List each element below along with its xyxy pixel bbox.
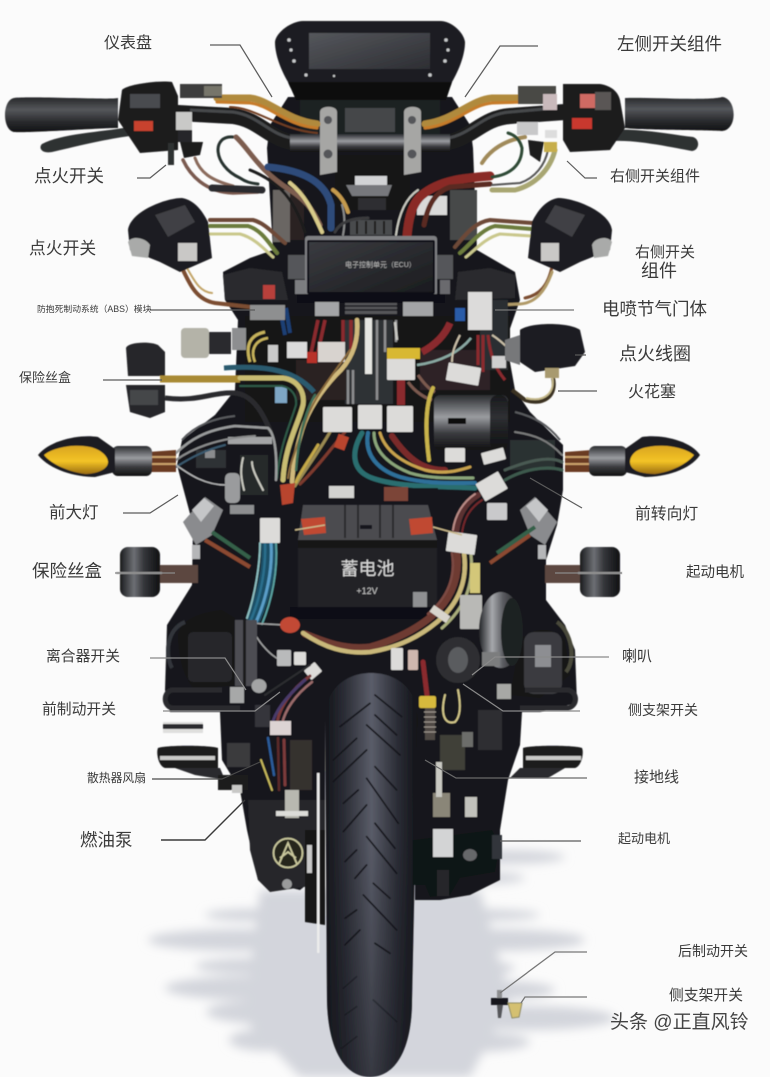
label: horn: 喇叭 [622, 648, 652, 665]
connectors below ECU [297, 294, 445, 316]
dashboard [275, 21, 465, 100]
right cream and brown harness [303, 553, 480, 652]
left engine case [165, 610, 266, 708]
label: clutch switch [46, 648, 246, 690]
label: headlight [49, 495, 178, 522]
gold conduit [160, 376, 240, 382]
right switch block [517, 84, 625, 162]
label: ignition coil: 点火线圈 [619, 344, 691, 364]
side stand and brake switch [491, 990, 522, 1018]
fork leg and logo [248, 773, 325, 953]
connector on lower loom [270, 721, 291, 735]
central headstock [273, 98, 477, 242]
label: instrument panel [104, 33, 272, 97]
logo badge [274, 838, 302, 868]
label: fuse box upper: 保险丝盒 [19, 370, 71, 385]
battery body [298, 540, 437, 607]
label: front turn signal: 前转向灯 [635, 505, 698, 523]
label: ignition switch lower: 点火开关 [29, 239, 96, 258]
label: left switch assembly: 左侧开关组件 [617, 34, 722, 54]
label: throttle body: 电喷节气门体 [602, 299, 707, 319]
lower chassis details [218, 705, 502, 897]
label: radiator fan: 散热器风扇 [87, 771, 146, 785]
label: left switch assembly [465, 34, 722, 97]
left brake lever [40, 127, 130, 152]
ABS and small side fittings [181, 292, 506, 403]
label: right switch assembly lower: 右侧开关 [635, 244, 695, 261]
connectors [260, 348, 508, 680]
label: side stand switch upper [463, 684, 698, 718]
dashboard indicator lights [287, 38, 450, 77]
main coloured wire bundles [176, 320, 562, 533]
left front mount [116, 547, 198, 597]
label: right switch assembly lower: 组件 [641, 261, 677, 281]
left mirror-mount switch [128, 198, 212, 272]
label: starter motor lower: 起动电机 [618, 831, 670, 846]
right foot peg [510, 746, 583, 778]
dome mid-tones [196, 450, 226, 468]
label: side stand switch lower: 侧支架开关 [669, 987, 743, 1004]
watermark: 头条 @正直风铃 [610, 1011, 749, 1033]
fork stems [273, 190, 290, 242]
label: right switch assembly upper: 右侧开关组件 [610, 168, 700, 185]
battery terminals [301, 517, 326, 535]
label: fuel pump: 燃油泵 [80, 830, 132, 850]
ground shadow [148, 850, 615, 1077]
label: horn [472, 648, 652, 675]
ECU [305, 236, 437, 296]
battery voltage: +12V [356, 586, 378, 596]
label: ignition switch upper: 点火开关 [34, 166, 104, 186]
horn [479, 592, 523, 668]
central harness: vertical wires below ECU [245, 300, 510, 422]
battery label: 蓄电池 [340, 559, 394, 579]
right crash bar [520, 690, 576, 708]
side dark modules by ECU [223, 255, 515, 300]
label: side stand switch lower [521, 987, 743, 1004]
label: spark plug [558, 383, 676, 401]
front tyre [325, 673, 418, 1077]
label: rear brake switch: 后制动开关 [678, 943, 748, 959]
right mirror-mount switch [528, 198, 612, 272]
battery top cover [298, 505, 437, 540]
left crash bar [165, 690, 240, 708]
label: fuse box lower: 保险丝盒 [32, 561, 102, 581]
label: ignition coil [575, 344, 691, 364]
turn signal right [565, 436, 700, 477]
left switch block [118, 81, 222, 165]
label: fuel pump [80, 800, 245, 850]
battery [290, 486, 445, 619]
label: ground wire: 接地线 [634, 769, 679, 786]
dashboard screen [309, 33, 430, 69]
right grip [615, 97, 734, 151]
label: ABS module: 防抱死制动系统（ABS）模块 [37, 303, 152, 314]
dome frame [182, 412, 560, 495]
chassis silhouette [165, 97, 577, 900]
label: headlight: 前大灯 [49, 503, 98, 522]
label: instrument panel: 仪表盘 [104, 33, 152, 52]
white neck connector [417, 196, 447, 215]
ECU label: 电子控制单元（ECU） [345, 260, 416, 269]
label: front brake switch [42, 692, 280, 718]
label: radiator fan [87, 762, 260, 785]
label: right switch assembly upper [567, 161, 700, 185]
label: ground wire [425, 760, 679, 786]
label: front turn signal [530, 478, 698, 523]
side grey connectors [183, 473, 557, 567]
handlebar clamps [320, 107, 421, 175]
handlebar wires: right [396, 98, 555, 305]
tyre tread grooves [333, 695, 402, 1048]
lower wiring and suspension [261, 662, 460, 790]
handlebar wires: left [183, 98, 368, 307]
right engine case and horn [436, 592, 576, 708]
label: starter motor upper: 起动电机 [686, 564, 744, 581]
right front mount [545, 547, 622, 597]
label: rear brake switch [500, 943, 748, 993]
label: side stand switch upper: 侧支架开关 [628, 702, 698, 718]
label: ignition switch upper [34, 165, 166, 186]
label: clutch switch: 离合器开关 [46, 648, 120, 665]
left blue harness [247, 543, 285, 660]
fork spring and collar [419, 696, 436, 740]
label: spark plug: 火花塞 [628, 383, 676, 401]
left foot peg [157, 722, 225, 780]
label: front brake switch: 前制动开关 [42, 701, 116, 718]
mid-tone loom fill [296, 300, 508, 404]
right ignition coil [505, 324, 585, 402]
turn signal left [38, 436, 176, 477]
handlebar tube [178, 112, 565, 143]
motor cylinder [434, 395, 508, 450]
spark plug lead [512, 378, 554, 402]
fuse box left [126, 343, 314, 433]
right brake lever [615, 130, 698, 151]
left grip [5, 97, 130, 152]
label: right switch assembly lower [635, 244, 695, 281]
